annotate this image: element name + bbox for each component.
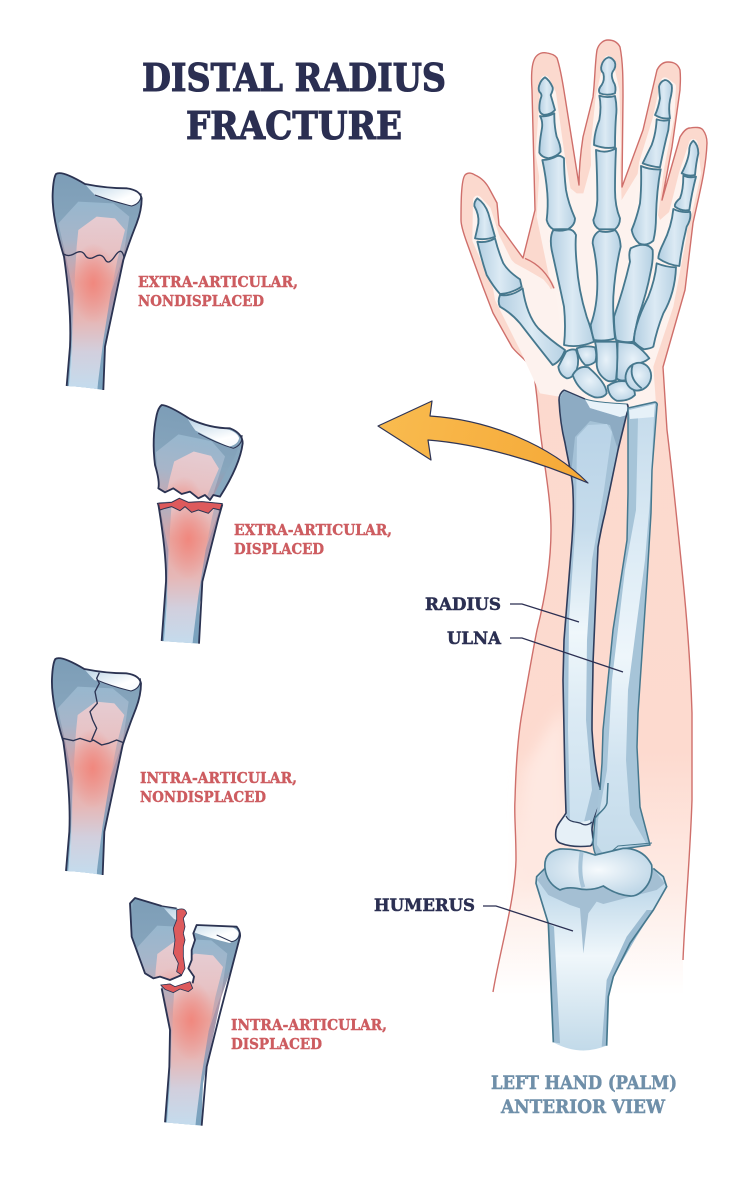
label: ulna: ULNA — [447, 629, 502, 649]
bone: intra-articular nondisplaced — [49, 652, 146, 878]
caption: left hand anterior view: LEFT HAND (PALM) — [491, 1072, 677, 1094]
label: extra-articular nondisplaced: NONDISPLACED — [138, 293, 264, 310]
lower fragment — [156, 498, 224, 644]
label: intra-articular displaced — [231, 1017, 387, 1053]
bone: extra-articular displaced — [152, 404, 244, 644]
ulna bone — [593, 402, 657, 859]
panel: forearm and hand anatomy — [461, 40, 707, 1050]
upper fragment — [129, 897, 188, 981]
leader line: humerus — [483, 906, 573, 931]
label: extra-articular displaced: DISPLACED — [234, 541, 324, 558]
caption: left hand anterior view — [491, 1072, 677, 1118]
label: extra-articular displaced — [234, 522, 392, 558]
arrow — [378, 401, 588, 483]
label: radius: RADIUS — [425, 595, 501, 615]
title: DISTAL RADIUS — [142, 55, 446, 100]
radius bone — [556, 390, 629, 847]
label: extra-articular nondisplaced: EXTRA-ARTICULAR, — [138, 274, 298, 291]
label: extra-articular displaced: EXTRA-ARTICULAR, — [234, 522, 392, 539]
bone: intra-articular displaced — [127, 891, 245, 1130]
label: intra-articular nondisplaced: NONDISPLACED — [140, 789, 266, 806]
label: intra-articular displaced: INTRA-ARTICULAR, — [231, 1017, 387, 1034]
leader line: radius — [510, 604, 579, 622]
label: intra-articular nondisplaced: INTRA-ARTICULAR, — [140, 770, 297, 787]
label: intra-articular displaced: DISPLACED — [231, 1036, 322, 1053]
skin silhouette — [461, 40, 707, 995]
label: humerus: HUMERUS — [374, 896, 475, 916]
lower fragment — [160, 924, 241, 1126]
hand bones — [474, 57, 698, 413]
bone: extra-articular nondisplaced — [50, 167, 147, 393]
humerus bone — [536, 848, 667, 1050]
title — [142, 55, 446, 148]
title: FRACTURE — [186, 103, 402, 148]
leader line: ulna — [510, 638, 623, 672]
caption: left hand anterior view: ANTERIOR VIEW — [500, 1096, 666, 1118]
label: intra-articular nondisplaced — [140, 770, 297, 806]
upper fragment — [152, 404, 244, 501]
label: extra-articular nondisplaced — [138, 274, 298, 310]
